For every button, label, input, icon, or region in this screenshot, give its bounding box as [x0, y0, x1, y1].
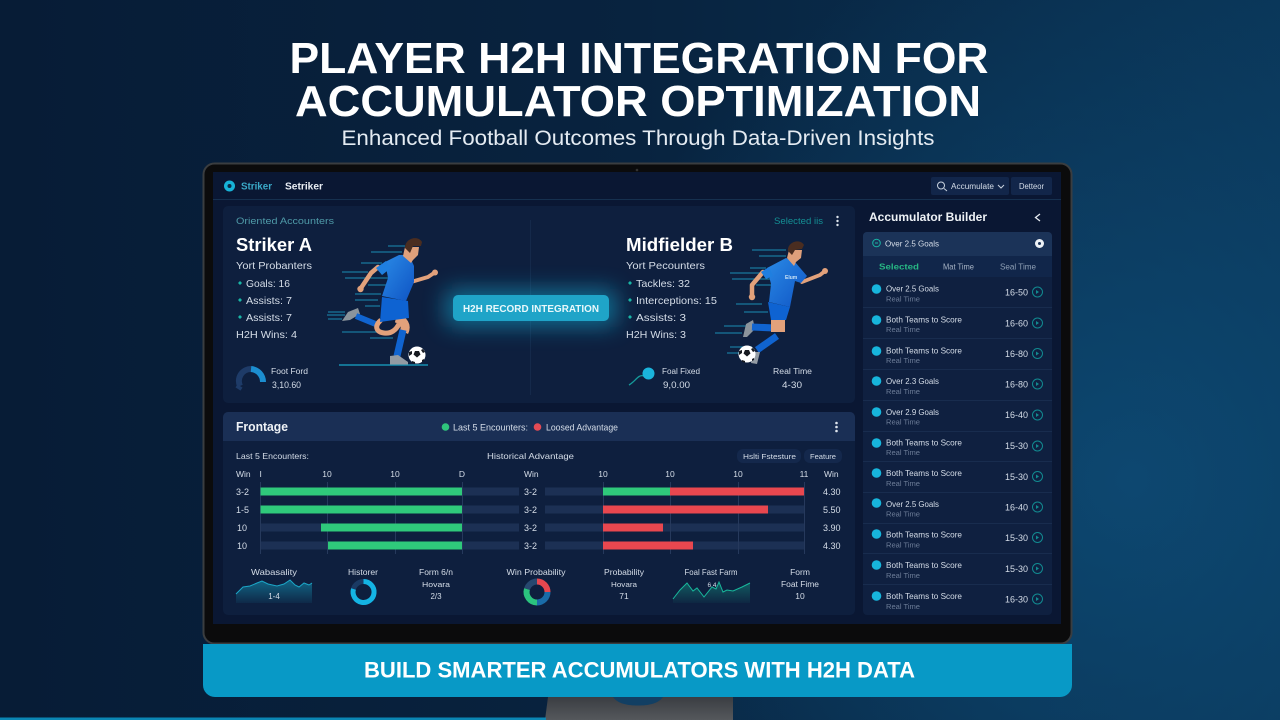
bar chart: historical advantage: Win: [824, 469, 839, 479]
metric: form time: Form: [790, 567, 810, 577]
top navigation bar: Setriker: [285, 182, 323, 192]
subtitle: Enhanced Football Outcomes Through Data-Driven Insights: [342, 127, 934, 150]
glowing H2H button: H2H RECORD INTEGRATION: [463, 303, 599, 315]
bet rows: Real Time: [886, 296, 920, 304]
bottom accent line: [0, 718, 546, 720]
striker A metric: [271, 367, 308, 390]
monitor stand: [545, 697, 733, 720]
striker A stats: Striker A: [236, 234, 312, 255]
bet rows: Both Teams to Score: [886, 530, 962, 540]
bet rows: Both Teams to Score: [886, 591, 962, 601]
bet rows: Real Time: [886, 481, 920, 488]
bar chart: historical advantage: Win: [524, 469, 539, 479]
striker A stats: Assists: 7: [246, 312, 292, 324]
metric: form: Form 6/n: [419, 567, 453, 577]
selected summary row: [873, 238, 1044, 248]
metric: form time: 10: [795, 591, 805, 601]
metric: probability: 71: [619, 591, 629, 601]
bet rows: Both Teams to Score: [886, 438, 962, 448]
legend: Last 5 Encounters:: [453, 422, 528, 434]
gauge: striker A: [238, 369, 263, 389]
bet rows: Real Time: [886, 573, 920, 580]
midfielder B stats: [626, 234, 733, 341]
trend marker: midfielder B: [629, 368, 654, 385]
title: [290, 34, 989, 126]
striker A stats: [236, 234, 312, 341]
bet rows: 16-80: [1005, 349, 1028, 359]
top navigation bar: Accumulate: [951, 182, 995, 191]
call to action banner: BUILD SMARTER ACCUMULATORS WITH H2H DATA: [364, 658, 915, 682]
bar chart: historical advantage: 5.50: [823, 505, 841, 515]
metric: probability: Hovara: [611, 580, 638, 589]
bet rows: Real Time: [886, 420, 920, 426]
bet rows: Over 2.9 Goals: [886, 407, 939, 417]
title: ACCUMULATOR OPTIMIZATION: [295, 77, 981, 126]
midfielder B stats: Assists: 3: [636, 312, 686, 324]
bet rows: 16-40: [1005, 410, 1028, 420]
metric: win probability donut: Win Probability: [506, 567, 566, 577]
metric: form: 2/3: [430, 592, 442, 601]
bar chart: historical advantage: 4.30: [823, 541, 841, 551]
metric: form: Hovara: [422, 580, 451, 589]
top navigation bar: Detteor: [1019, 182, 1044, 191]
chart sub headings: [236, 449, 842, 463]
metric: sparkline one: Wabasality: [251, 567, 298, 577]
builder heading: Accumulator Builder: [869, 210, 987, 224]
bet rows: Real Time: [886, 389, 920, 396]
tabs: Seal Time: [1000, 262, 1036, 272]
metric: sparkline two: Foal Fast Farm: [684, 567, 738, 577]
bar chart: last 5 encounters: I: [260, 469, 262, 479]
tabs: Selected: [879, 262, 919, 272]
top navigation bar: [213, 177, 1061, 200]
bet rows: Over 2.3 Goals: [886, 376, 939, 386]
metric: history donut: [348, 567, 378, 602]
metric: sparkline two: [673, 567, 750, 603]
metric: form: [419, 567, 453, 601]
bar chart: historical advantage: 10: [733, 469, 743, 479]
bet rows: Over 2.5 Goals: [886, 499, 939, 509]
bar chart: last 5 encounters: 3-2: [236, 487, 249, 497]
metric: win probability donut: [506, 567, 566, 602]
bar chart: historical advantage: 10: [598, 469, 608, 479]
midfielder B metrics: Real Time: [773, 367, 813, 376]
chart sub headings: Last 5 Encounters:: [236, 451, 309, 461]
bet rows: 15-30: [1005, 472, 1028, 482]
tabs: Mat Time: [943, 262, 974, 272]
bet rows: Both Teams to Score: [886, 468, 962, 478]
bet rows: Real Time: [886, 542, 920, 550]
metric: form time: [781, 567, 820, 601]
legend: [442, 422, 618, 434]
bar chart: last 5 encounters: 10: [390, 469, 400, 479]
tabs: [879, 262, 1036, 272]
bar chart: historical advantage: [524, 469, 841, 554]
midfielder B stats: Tackles: 32: [636, 278, 690, 290]
bar chart: historical advantage: 3.90: [823, 523, 841, 533]
bar chart: last 5 encounters: Win: [236, 469, 251, 479]
selected summary row: Over 2.5 Goals: [885, 238, 939, 248]
monitor bezel: [204, 164, 1072, 644]
bet rows: 15-30: [1005, 533, 1028, 543]
striker A metric: Foot Ford: [271, 367, 308, 376]
call to action banner: [203, 644, 1072, 697]
striker A stats: Yort Probanters: [236, 260, 312, 272]
icon: striker A player: [327, 238, 438, 365]
bet rows: Real Time: [886, 512, 920, 518]
glowing H2H button: [445, 289, 617, 327]
metric: history donut: Historer: [348, 567, 378, 577]
panel: player comparison: [223, 206, 855, 403]
bet rows: Both Teams to Score: [886, 346, 962, 356]
bar chart: historical advantage: 3-2: [524, 523, 537, 533]
bet rows: Real Time: [886, 450, 920, 457]
panel heading: Frontage: [236, 419, 288, 434]
metric: probability: [604, 567, 645, 601]
bet rows: 15-30: [1005, 564, 1028, 574]
bet rows: Real Time: [886, 604, 920, 611]
midfielder B metrics: 4-30: [782, 380, 802, 390]
title: PLAYER H2H INTEGRATION FOR: [290, 34, 989, 83]
striker A stats: Assists: 7: [246, 295, 292, 307]
bar chart: historical advantage: 3-2: [524, 505, 537, 515]
bet rows: 16-80: [1005, 380, 1028, 390]
bet rows: [872, 284, 1042, 611]
metric: sparkline one: 1-4: [268, 592, 280, 601]
midfielder B metrics: [662, 367, 813, 390]
bar chart: historical advantage: 11: [800, 469, 809, 479]
bet rows: Real Time: [886, 358, 920, 365]
selected label and menu: Selected iis: [774, 216, 824, 226]
legend: Loosed Advantage: [546, 422, 618, 434]
menu icon: [835, 422, 838, 432]
metric: probability: Probability: [604, 567, 645, 577]
panel label: Oriented Accounters: [236, 216, 335, 226]
midfielder B stats: Yort Pecounters: [626, 260, 705, 272]
bet rows: 16-60: [1005, 318, 1028, 328]
bet rows: Over 2.5 Goals: [886, 284, 939, 294]
bar chart: last 5 encounters: 10: [322, 469, 332, 479]
bet rows: Both Teams to Score: [886, 560, 962, 570]
metric: sparkline two: 6.4: [707, 582, 717, 589]
striker A stats: H2H Wins: 4: [236, 329, 297, 341]
striker A metric: 3,10.60: [272, 380, 301, 390]
builder heading: [869, 210, 1040, 224]
metric: sparkline one: [236, 567, 312, 603]
chart sub headings: Historical Advantage: [487, 451, 574, 461]
bar chart: last 5 encounters: D: [459, 469, 465, 479]
chart sub headings: Feature: [810, 452, 836, 461]
bet rows: Both Teams to Score: [886, 314, 962, 324]
bar chart: historical advantage: 3-2: [524, 541, 537, 551]
bet rows: 16-50: [1005, 288, 1028, 298]
midfielder B stats: Midfielder B: [626, 234, 733, 255]
icon: midfielder B player: Elum: [785, 275, 798, 281]
bet rows: 15-30: [1005, 441, 1028, 451]
bar chart: last 5 encounters: 10: [237, 541, 247, 551]
bar chart: historical advantage: 10: [665, 469, 675, 479]
chart sub headings: Hslti Fstesture: [743, 452, 796, 461]
bet rows: 16-40: [1005, 502, 1028, 512]
panel: head to head frontage: [223, 412, 855, 615]
striker A stats: Goals: 16: [246, 278, 290, 290]
bar chart: last 5 encounters: 10: [237, 523, 247, 533]
midfielder B stats: Interceptions: 15: [636, 295, 717, 307]
midfielder B metrics: Foal Fixed: [662, 367, 700, 376]
bet rows: 16-30: [1005, 594, 1028, 604]
icon: midfielder B player: [715, 241, 828, 364]
bar chart: last 5 encounters: 1-5: [236, 505, 249, 515]
bar chart: historical advantage: 3-2: [524, 487, 537, 497]
bet rows: Real Time: [886, 327, 920, 334]
bar chart: historical advantage: 4.30: [823, 487, 841, 497]
midfielder B metrics: 9,0.00: [663, 380, 690, 390]
panel: accumulator builder: [863, 210, 1052, 615]
bar chart: last 5 encounters: [236, 469, 519, 554]
top navigation bar: Striker: [241, 182, 272, 192]
midfielder B stats: H2H Wins: 3: [626, 329, 686, 341]
selected label and menu: [774, 216, 839, 226]
metric: form time: Foat Fime: [781, 580, 820, 589]
